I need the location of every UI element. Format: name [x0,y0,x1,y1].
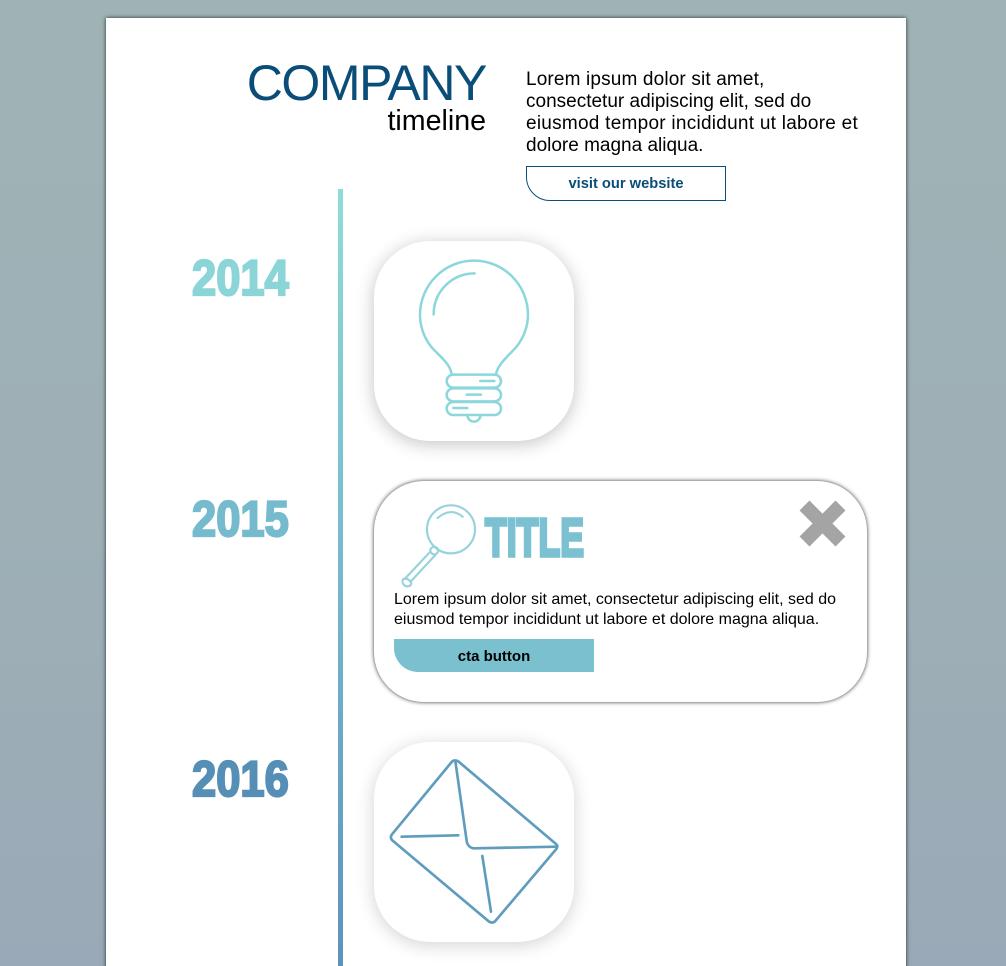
timeline vertical line [338,189,343,966]
intro text block: dolore magna aliqua. [526,135,703,156]
icon: magnifying glass [402,504,476,588]
year 2014: 2014 [192,250,289,306]
title: COMPANY [247,55,486,111]
cta button: cta button [458,648,530,665]
website button [526,166,726,201]
panel body text: eiusmod tempor incididunt ut labore et dolore magna aliqua. [394,611,819,628]
subtitle: timeline [387,105,486,137]
website button: visit our website [568,176,684,192]
panel body text: Lorem ipsum dolor sit amet, consectetur adipiscing elit, sed do [394,591,836,608]
card: lightbulb icon [374,241,574,441]
intro text block: eiusmod tempor incididunt ut labore et [526,113,858,134]
icon: envelope [390,759,559,924]
card: envelope icon [374,742,574,942]
panel body text [394,591,836,628]
year 2016: 2016 [192,751,289,807]
panel title: TITLE [485,508,584,568]
year 2015: 2015 [192,491,289,547]
intro text block [526,69,858,156]
icon: lightbulb [418,259,530,423]
intro text block: consectetur adipiscing elit, sed do [526,91,811,112]
page panel [106,18,906,966]
card: detail panel 2015 [374,481,867,702]
cta button [394,639,594,672]
intro text block: Lorem ipsum dolor sit amet, [526,69,764,90]
icon: close X [800,500,846,546]
